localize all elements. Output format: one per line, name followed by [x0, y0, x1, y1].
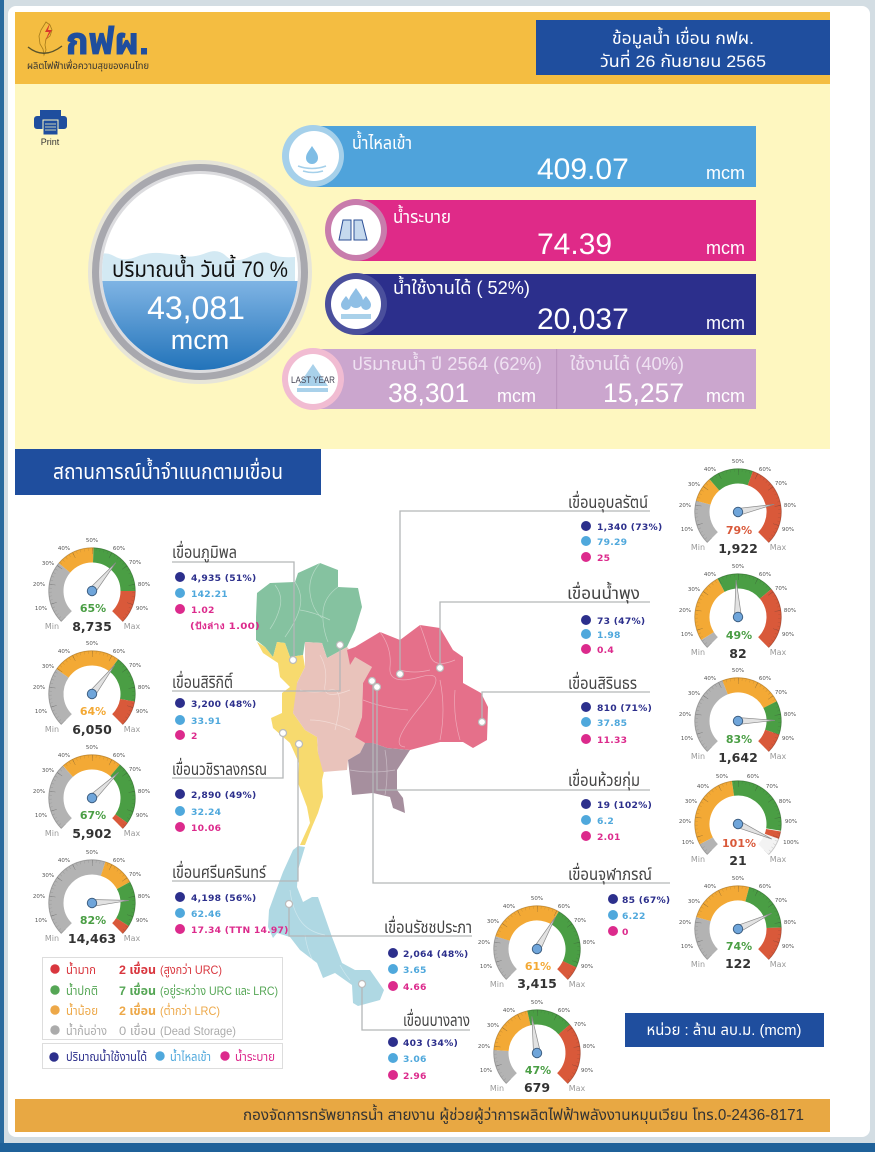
gauge: Ubol Ratana: 90% — [782, 527, 794, 533]
gauge: Srinagarind — [33, 844, 151, 962]
gauge: Bhumibol: 65% — [80, 602, 106, 615]
bar: inflow: 409.07 — [537, 153, 629, 186]
gauge: Sirikit: 40% — [58, 649, 70, 655]
gauge: Bhumibol — [33, 532, 151, 650]
dam: Huai Kum: เขื่อนห้วยกุ่ม — [568, 768, 640, 791]
gauge: Sirikit: 90% — [136, 709, 148, 715]
icon: water drops — [325, 273, 387, 335]
gauge: Bhumibol: 60% — [113, 546, 125, 552]
total water gauge circle: mcm — [171, 325, 229, 355]
gauge: Huai Kum: Min — [691, 855, 705, 864]
gauge: Bhumibol: 50% — [86, 538, 98, 544]
gauge: Sirikit: 60% — [113, 649, 125, 655]
legend: series — [42, 1044, 282, 1068]
gauge: Chulabhorn: 20% — [679, 920, 691, 926]
legend: water status: น้ำน้อย — [66, 1002, 98, 1018]
gauge: Ratchaprapha: 40% — [503, 904, 515, 910]
dam: Sirikit: 3,200 (48%) — [191, 699, 256, 710]
bar: last year: ปริมาณน้ำ ปี 2564 (62%) — [352, 351, 542, 374]
icon: printer — [34, 110, 67, 147]
gauge: Vajiralongkorn: 30% — [42, 768, 54, 774]
gauge: Sirikit: 30% — [42, 664, 54, 670]
bar: inflow — [282, 125, 756, 187]
region: northeast — [347, 625, 488, 750]
gauge: Sirindhorn: 60% — [759, 676, 771, 682]
gauge: Srinagarind: 60% — [113, 858, 125, 864]
gauge: Nam Phung: 20% — [679, 608, 691, 614]
gauge: Ubol Ratana: 50% — [732, 459, 744, 465]
gauge: Ratchaprapha: 70% — [574, 918, 586, 924]
gauge: Huai Kum: 30% — [685, 799, 697, 805]
gauge: Ratchaprapha: Max — [569, 980, 586, 989]
gauge: Ratchaprapha: 20% — [478, 940, 490, 946]
gauge: Huai Kum: 40% — [697, 784, 709, 790]
dam: Ratchaprapha — [384, 915, 472, 993]
gauge: Sirikit: 70% — [129, 663, 141, 669]
gauge: Bang Lang: 47% — [525, 1064, 551, 1077]
header band — [15, 12, 830, 84]
dam: Bang Lang: เขื่อนบางลาง — [403, 1008, 470, 1030]
gauge: Bang Lang: 20% — [478, 1044, 490, 1050]
gauge: Chulabhorn: 30% — [688, 899, 700, 905]
gauge: Nam Phung — [679, 558, 797, 676]
dam: Vajiralongkorn: 10.06 — [191, 823, 221, 834]
gauge: Ratchaprapha: 50% — [531, 896, 543, 902]
gauge: Sirindhorn: 70% — [775, 690, 787, 696]
panel: water summary — [15, 84, 830, 449]
gauge: Vajiralongkorn: Min — [45, 829, 59, 838]
gauge: Srinagarind: 20% — [33, 894, 45, 900]
gauge: Bang Lang: 90% — [581, 1068, 593, 1074]
dam: Ubol Ratana: 1,340 (73%) — [597, 522, 662, 533]
title box — [536, 20, 830, 75]
dam: Ubol Ratana: 25 — [597, 553, 610, 564]
gauge: Bang Lang: 50% — [531, 1000, 543, 1006]
section heading: สถานการณ์น้ำจำแนกตามเขื่อน — [53, 457, 283, 484]
dam: Bhumibol — [172, 540, 260, 632]
province borders — [270, 563, 460, 980]
gauge: Ubol Ratana: 79% — [726, 524, 752, 537]
gauge: Srinagarind: Max — [124, 934, 141, 943]
gauge: Bang Lang: 30% — [487, 1023, 499, 1029]
gauge: Vajiralongkorn: 70% — [129, 767, 141, 773]
dam: Bhumibol: 4,935 (51%) — [191, 573, 256, 584]
gauge: Sirindhorn: 83% — [726, 733, 752, 746]
gauge: Chulabhorn: Min — [691, 960, 705, 969]
leader lines — [172, 511, 670, 1030]
gauge: Chulabhorn: 74% — [726, 940, 752, 953]
gauge: Sirikit: Min — [45, 725, 59, 734]
gauge: Sirindhorn: 20% — [679, 712, 691, 718]
gauge: Chulabhorn: 122 — [725, 956, 751, 971]
gauge: Ratchaprapha: Min — [490, 980, 504, 989]
gauge: Bhumibol: 80% — [138, 582, 150, 588]
gauge: Ubol Ratana: 1,922 — [718, 541, 758, 556]
dam: Ratchaprapha: เขื่อนรัชชประภา — [384, 915, 472, 937]
region: central — [293, 642, 372, 772]
legend: water status: น้ำปกติ — [66, 982, 98, 998]
gauge: Nam Phung: 49% — [726, 629, 752, 642]
gauge: Huai Kum: 80% — [779, 799, 791, 805]
gauge: Ratchaprapha: 90% — [581, 964, 593, 970]
dam: Bang Lang: 403 (34%) — [403, 1038, 458, 1049]
dam: Nam Phung: เขื่อนน้ำพุง — [567, 581, 640, 604]
dam: Huai Kum: 2.01 — [597, 832, 621, 843]
gauge: Huai Kum: 100% — [783, 840, 799, 846]
gauge: Ubol Ratana: 30% — [688, 482, 700, 488]
dam: Srinagarind: 62.46 — [191, 909, 221, 920]
bar: usable water: น้ำใช้งานได้ ( 52%) — [393, 275, 530, 298]
map dam markers — [280, 642, 486, 988]
gauge: Bang Lang — [478, 994, 596, 1112]
icon: last year: LAST YEAR — [291, 375, 335, 385]
gauge: Vajiralongkorn: Max — [124, 829, 141, 838]
gauge: Huai Kum: 101% — [722, 837, 756, 850]
gauge: Srinagarind: 14,463 — [68, 931, 116, 946]
dam: Ratchaprapha: 3.65 — [403, 965, 427, 976]
dam: Sirindhorn: เขื่อนสิรินธร — [568, 671, 637, 693]
dam: Nam Phung: 1.98 — [597, 630, 621, 641]
legend: series: ปริมาณน้ำใช้งานได้ — [66, 1048, 147, 1064]
gauge: Ratchaprapha: 10% — [480, 964, 492, 970]
dam: Bang Lang: 2.96 — [403, 1071, 427, 1082]
gauge: Vajiralongkorn: 10% — [35, 813, 47, 819]
gauge: Ubol Ratana: 40% — [704, 467, 716, 473]
region: north — [256, 563, 362, 658]
dam: Chulabhorn — [568, 862, 670, 938]
gauge: Ubol Ratana: 60% — [759, 467, 771, 473]
gauge: Bang Lang: Max — [569, 1084, 586, 1093]
gauge: Sirindhorn: 30% — [688, 691, 700, 697]
gauge: Vajiralongkorn: 90% — [136, 813, 148, 819]
bar: last year: 15,257 — [603, 378, 684, 408]
gauge: Sirindhorn: 50% — [732, 668, 744, 674]
gauge: Sirikit: 6,050 — [72, 722, 112, 737]
gauge: Nam Phung: 80% — [784, 608, 796, 614]
gauge: Sirindhorn: 90% — [782, 736, 794, 742]
logo — [27, 21, 149, 72]
gauge: Bang Lang: Min — [490, 1084, 504, 1093]
legend: water status: น้ำก้นอ่าง — [66, 1022, 107, 1038]
dam: Sirindhorn: 37.85 — [597, 718, 627, 729]
gauge: Nam Phung: Max — [770, 648, 787, 657]
gauge: Sirikit: 50% — [86, 641, 98, 647]
gauge: Bang Lang: 10% — [480, 1068, 492, 1074]
dam: Vajiralongkorn: 2,890 (49%) — [191, 790, 256, 801]
gauge: Bang Lang: 40% — [503, 1008, 515, 1014]
legend: water status: (อยู่ระหว่าง URC และ LRC) — [160, 984, 278, 998]
total water gauge circle: 43,081 — [147, 290, 245, 326]
legend: series: น้ำระบาย — [235, 1048, 275, 1064]
title box: ข้อมูลน้ำ เขื่อน กฟผ. — [612, 26, 754, 50]
gauge: Nam Phung: 10% — [681, 632, 693, 638]
bar: usable water: 20,037 — [537, 303, 629, 336]
gauge: Chulabhorn: 80% — [784, 920, 796, 926]
gauge: Sirikit: 64% — [80, 705, 106, 718]
gauge: Bhumibol: 30% — [42, 561, 54, 567]
legend: water status: (ต่ำกว่า LRC) — [160, 1002, 220, 1018]
dam: Srinagarind: 17.34 (TTN 14.97) — [191, 925, 289, 936]
gauge: Srinagarind: 82% — [80, 914, 106, 927]
dam: Ubol Ratana — [568, 490, 662, 564]
unit callout — [625, 1013, 824, 1047]
gauge: Huai Kum: 70% — [766, 784, 778, 790]
gauge: Ratchaprapha: 30% — [487, 919, 499, 925]
map of Thailand — [256, 563, 488, 1006]
dam: Srinagarind: 4,198 (56%) — [191, 893, 256, 904]
gauge: Bhumibol: 40% — [58, 546, 70, 552]
gauge: Huai Kum — [679, 765, 799, 883]
gauge: Sirikit: 20% — [33, 685, 45, 691]
gauge: Nam Phung: 40% — [704, 572, 716, 578]
dam: Huai Kum: 6.2 — [597, 816, 614, 827]
gauge: Sirindhorn — [679, 662, 797, 780]
gauge: Ubol Ratana: Max — [770, 543, 787, 552]
gauge: Srinagarind: 10% — [35, 918, 47, 924]
gauge: Ubol Ratana: Min — [691, 543, 705, 552]
dam: Bhumibol: 1.02 — [191, 605, 215, 616]
gauge: Vajiralongkorn: 40% — [58, 753, 70, 759]
dam: Chulabhorn: 6.22 — [622, 911, 646, 922]
footer: กองจัดการทรัพยากรน้ำ สายงาน ผู้ช่วยผู้ว่าการผลิตไฟฟ้าพลังงานหมุนเวียน โทร.0-2436-8171 — [243, 1104, 804, 1124]
gauge: Bhumibol: 90% — [136, 606, 148, 612]
bar: last year — [282, 348, 756, 410]
gauge: Huai Kum: 21 — [729, 853, 747, 868]
logo: กฟผ. — [66, 21, 149, 62]
gauge: Nam Phung: 30% — [688, 587, 700, 593]
gauge: Srinagarind: 80% — [138, 894, 150, 900]
gauge: Vajiralongkorn: 20% — [33, 789, 45, 795]
gauge: Bhumibol: 70% — [129, 560, 141, 566]
region: south — [268, 846, 384, 1006]
icon: inflow drop — [282, 125, 344, 187]
bar: inflow: mcm — [706, 163, 745, 183]
gauge: Nam Phung: Min — [691, 648, 705, 657]
gauge: Ubol Ratana: 20% — [679, 503, 691, 509]
legend: series: น้ำไหลเข้า — [170, 1048, 211, 1064]
bar: usable water: mcm — [706, 313, 745, 333]
legend: water status — [42, 958, 282, 1040]
dam: Srinagarind: เขื่อนศรีนครินทร์ — [172, 860, 267, 882]
gauge: Nam Phung: 60% — [759, 572, 771, 578]
gauge: Sirikit — [33, 635, 151, 753]
bar: usable water — [325, 273, 756, 336]
total water gauge circle — [88, 160, 312, 384]
gauge: Vajiralongkorn: 50% — [86, 745, 98, 751]
dam: Bhumibol: 142.21 — [191, 589, 228, 600]
gauge: Sirindhorn: 10% — [681, 736, 693, 742]
gauge: Ratchaprapha: 3,415 — [517, 976, 557, 991]
dam: Chulabhorn: เขื่อนจุฬาภรณ์ — [568, 862, 652, 885]
gauge: Chulabhorn: 60% — [759, 884, 771, 890]
gauge: Huai Kum: 20% — [679, 819, 691, 825]
dam: Huai Kum: 19 (102%) — [597, 800, 652, 811]
gauge: Srinagarind: 50% — [86, 850, 98, 856]
gauge: Chulabhorn: 90% — [782, 944, 794, 950]
gauge: Chulabhorn: 50% — [732, 876, 744, 882]
gauge: Nam Phung: 90% — [782, 632, 794, 638]
logo: ผลิตไฟฟ้าเพื่อความสุขของคนไทย — [27, 59, 149, 72]
dam: Bhumibol: เขื่อนภูมิพล — [172, 540, 237, 564]
dam: Ratchaprapha: 4.66 — [403, 982, 427, 993]
dam: Chulabhorn: 85 (67%) — [622, 895, 670, 906]
gauge: Vajiralongkorn: 80% — [138, 789, 150, 795]
gauge: Srinagarind: 30% — [42, 873, 54, 879]
dam: Vajiralongkorn: 32.24 — [191, 807, 221, 818]
gauge: Bhumibol: Min — [45, 622, 59, 631]
gauge: Ratchaprapha: 61% — [525, 960, 551, 973]
gauge: Srinagarind: 70% — [129, 872, 141, 878]
gauge: Bhumibol: Max — [124, 622, 141, 631]
legend: water status: (สูงกว่า URC) — [160, 963, 222, 977]
gauge: Nam Phung: 82 — [729, 646, 747, 661]
gauge: Bhumibol: 20% — [33, 582, 45, 588]
bar: last year: 38,301 — [388, 378, 469, 408]
legend: water status: น้ำมาก — [66, 961, 96, 977]
dam: Sirikit: 33.91 — [191, 716, 221, 727]
title box: วันที่ 26 กันยายน 2565 — [600, 49, 766, 71]
dam: Vajiralongkorn: เขื่อนวชิราลงกรณ — [172, 757, 267, 779]
gauge: Srinagarind: 40% — [58, 858, 70, 864]
dam: Sirindhorn — [568, 671, 652, 746]
dam: Ubol Ratana: เขื่อนอุบลรัตน์ — [568, 490, 648, 513]
gauge: Srinagarind: Min — [45, 934, 59, 943]
legend: water status: (Dead Storage) — [160, 1024, 236, 1038]
gauge: Huai Kum: 10% — [682, 840, 694, 846]
gauge: Ubol Ratana — [679, 453, 797, 571]
gauge: Sirindhorn: Min — [691, 752, 705, 761]
gauge: Sirikit: Max — [124, 725, 141, 734]
gauge: Huai Kum: 50% — [716, 774, 728, 780]
gauge: Bang Lang: 70% — [574, 1022, 586, 1028]
gauge: Bang Lang: 60% — [558, 1008, 570, 1014]
gauge: Sirindhorn: 80% — [784, 712, 796, 718]
legend: water status: 7 เขื่อน — [119, 982, 156, 998]
dam: Nam Phung — [567, 581, 645, 656]
dam: Sirikit — [172, 670, 256, 742]
dam: Nam Phung: 73 (47%) — [597, 616, 645, 627]
dam: Srinagarind — [172, 860, 289, 936]
gauge: Vajiralongkorn: 60% — [113, 753, 125, 759]
dam: Sirikit: 2 — [191, 731, 198, 742]
gauge: Chulabhorn: Max — [770, 960, 787, 969]
gauge: Huai Kum: Max — [770, 855, 787, 864]
gauge: Ubol Ratana: 80% — [784, 503, 796, 509]
dam: Bhumibol: (ปังล่าง 1.00) — [190, 621, 260, 632]
region: east — [348, 743, 410, 813]
icon: last year — [282, 348, 344, 410]
gauge: Chulabhorn: 70% — [775, 898, 787, 904]
gauge: Vajiralongkorn: 67% — [80, 809, 106, 822]
dam: Sirindhorn: 810 (71%) — [597, 703, 652, 714]
gauge: Sirindhorn: 1,642 — [718, 750, 758, 765]
dam: Huai Kum — [568, 768, 652, 843]
gauge: Sirindhorn: Max — [770, 752, 787, 761]
gauge: Chulabhorn: 10% — [681, 944, 693, 950]
bar: last year: ใช้งานได้ (40%) — [570, 354, 684, 374]
gauge: Chulabhorn — [679, 870, 797, 988]
gauge: Bang Lang: 679 — [524, 1080, 550, 1095]
dam: Sirikit: เขื่อนสิริกิติ์ — [172, 670, 233, 692]
dam: Ratchaprapha: 2,064 (48%) — [403, 949, 468, 960]
gauge: Huai Kum: 60% — [747, 774, 759, 780]
gauge: Huai Kum: 90% — [785, 819, 797, 825]
dam: Chulabhorn: 0 — [622, 927, 629, 938]
gauge: Sirindhorn: 40% — [704, 676, 716, 682]
legend: water status: 0 เขื่อน — [119, 1022, 156, 1038]
gauge: Sirikit: 10% — [35, 709, 47, 715]
gauge: Srinagarind: 90% — [136, 918, 148, 924]
bar: discharge: 74.39 — [537, 228, 612, 261]
gauge: Ratchaprapha: 60% — [558, 904, 570, 910]
bar: last year: mcm — [706, 386, 745, 406]
region: west — [257, 642, 325, 845]
bar: discharge: mcm — [706, 238, 745, 258]
icon: dam gates — [325, 199, 387, 261]
gauge: Nam Phung: 70% — [775, 586, 787, 592]
gauge: Nam Phung: 50% — [732, 564, 744, 570]
section heading — [15, 449, 321, 495]
unit callout: หน่วย : ล้าน ลบ.ม. (mcm) — [646, 1021, 802, 1039]
gauge: Ubol Ratana: 70% — [775, 481, 787, 487]
icon: printer: Print — [41, 137, 60, 147]
bar: last year: mcm — [497, 386, 536, 406]
gauge: Ubol Ratana: 10% — [681, 527, 693, 533]
dam: Bang Lang: 3.06 — [403, 1054, 427, 1065]
dam: Nam Phung: 0.4 — [597, 645, 614, 656]
legend: water status: 2 เขื่อน — [119, 961, 156, 977]
gauge: Vajiralongkorn: 5,902 — [72, 826, 112, 841]
total water gauge circle: ปริมาณน้ำ วันนี้ 70 % — [112, 254, 288, 282]
gauge: Chulabhorn: 40% — [704, 884, 716, 890]
gauge: Vajiralongkorn — [33, 739, 151, 857]
legend: water status: 2 เขื่อน — [119, 1002, 156, 1018]
dam: Bang Lang — [388, 1008, 470, 1082]
bar: discharge — [325, 199, 756, 261]
gauge: Ratchaprapha — [478, 890, 596, 1008]
gauge: Bhumibol: 10% — [35, 606, 47, 612]
footer — [15, 1099, 830, 1132]
bar: inflow: น้ำไหลเข้า — [352, 130, 412, 153]
dam: Sirindhorn: 11.33 — [597, 735, 627, 746]
gauge: Bang Lang: 80% — [583, 1044, 595, 1050]
dam: Ubol Ratana: 79.29 — [597, 537, 627, 548]
gauge: Bhumibol: 8,735 — [72, 619, 112, 634]
gauge: Sirikit: 80% — [138, 685, 150, 691]
dam: Vajiralongkorn — [172, 757, 267, 834]
gauge: Ratchaprapha: 80% — [583, 940, 595, 946]
bar: discharge: น้ำระบาย — [393, 204, 451, 227]
